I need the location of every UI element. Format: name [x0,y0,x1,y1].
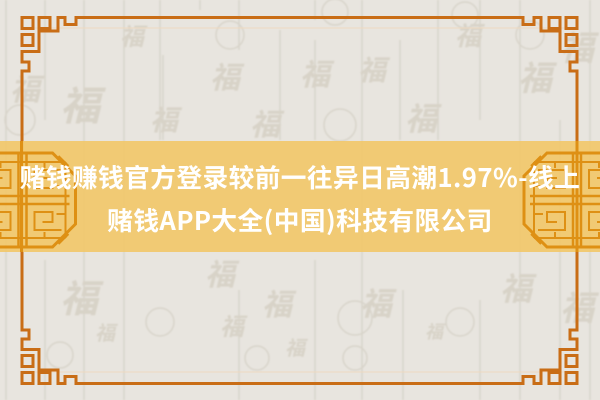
paper background texture: 福 [560,281,600,330]
paper background texture: 福 [358,49,391,89]
paper background texture: 福 [250,100,285,144]
paper background texture: 福 [60,268,104,323]
paper background texture: 福 [262,280,297,324]
title: 赌钱赚钱官方登录较前一往异日高潮1.97%-线上 [20,158,580,195]
paper background texture: 福 [455,16,485,53]
title [20,158,580,238]
paper background texture: 福 [120,17,148,52]
paper background texture: 福 [518,51,558,100]
title: 赌钱APP大全(中国)科技有限公司 [107,201,493,238]
paper background texture: 福 [95,317,118,346]
icon: right octagonal lattice medallion [524,153,600,247]
paper background texture: 福 [360,279,397,325]
paper background texture: 福 [560,21,600,70]
paper background texture: 福 [405,94,442,140]
paper background texture: 福 [150,99,183,139]
paper background texture: 福 [425,318,446,344]
paper background texture: 福 [60,74,106,132]
paper background texture: 福 [285,332,308,361]
paper background texture: 福 [220,307,248,342]
paper background texture: 福 [300,50,335,94]
icon: left octagonal lattice medallion [0,153,76,247]
paper background texture: 福 [10,65,45,109]
border lines crossing the band [22,141,577,252]
paper background texture: 福 [205,250,240,294]
yellow title band [0,141,600,252]
paper background texture: 福 [500,264,537,310]
paper background texture: 福 [210,53,245,97]
